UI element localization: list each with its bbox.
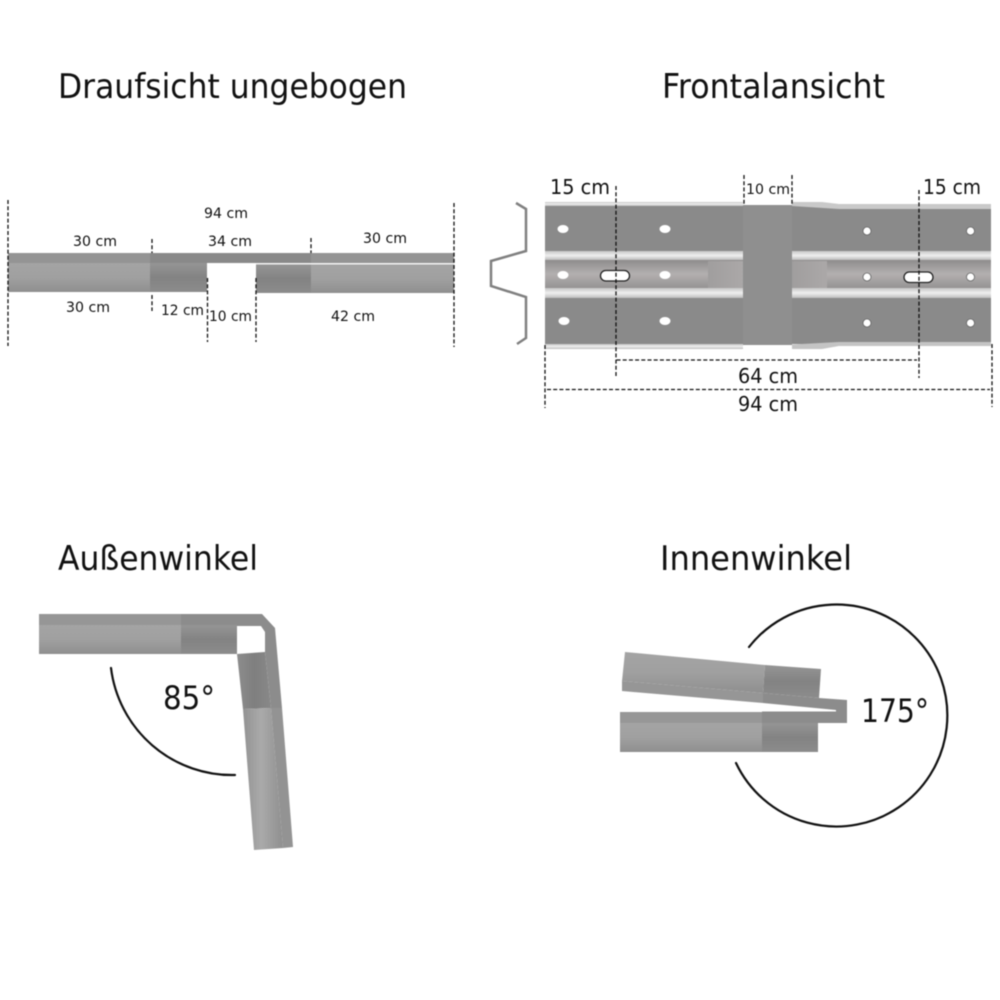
- top view dimension labels: 12 cm: [161, 303, 204, 319]
- top view dimension labels: 10 cm: [209, 309, 252, 325]
- top view dimension labels: 30 cm: [73, 234, 117, 250]
- top view guard rail: [8, 253, 454, 293]
- center overlap plate: [743, 205, 792, 345]
- title: Frontalansicht: Frontalansicht: [662, 67, 885, 107]
- front view dimension labels: 64 cm: [738, 364, 798, 388]
- outer angle value: 85°: [163, 679, 215, 717]
- top view dimension labels: 94 cm: [204, 206, 248, 222]
- outer angle arc: [111, 668, 235, 775]
- top view dashed dimension lines: [8, 200, 454, 347]
- front view dimension labels: 94 cm: [738, 392, 798, 416]
- panel: outer angle diagram: [39, 614, 293, 850]
- top view dimension labels: 30 cm: [363, 231, 407, 247]
- front view dimension labels: 15 cm: [550, 175, 610, 199]
- inner angle upper rail: [622, 652, 847, 711]
- outer angle bent rail: [39, 614, 293, 850]
- top view dimension labels: 42 cm: [331, 309, 375, 325]
- inner angle value: 175°: [861, 692, 929, 730]
- left rail section: [545, 202, 743, 349]
- top view dimension labels: 30 cm: [66, 300, 110, 316]
- title: Außenwinkel: Außenwinkel: [58, 539, 258, 579]
- top view dimension labels: 34 cm: [208, 234, 252, 250]
- panel: front view diagram: [491, 175, 992, 416]
- front view dashed dimension lines: [545, 175, 992, 408]
- front view dimension labels: 10 cm: [746, 182, 790, 198]
- title: Innenwinkel: Innenwinkel: [660, 539, 852, 579]
- inner angle lower rail: [620, 700, 847, 752]
- panel: inner angle diagram: [620, 605, 947, 827]
- title: Draufsicht ungebogen: Draufsicht ungebogen: [58, 67, 407, 107]
- right rail section: [792, 202, 991, 349]
- top view dimension labels: [66, 206, 407, 325]
- front view dimension labels: 15 cm: [923, 175, 981, 199]
- icon: rail cross-section profile: [491, 203, 526, 344]
- panel: top view diagram: [8, 200, 454, 347]
- inner angle arc: [736, 605, 947, 827]
- front view dimension labels: [550, 175, 981, 416]
